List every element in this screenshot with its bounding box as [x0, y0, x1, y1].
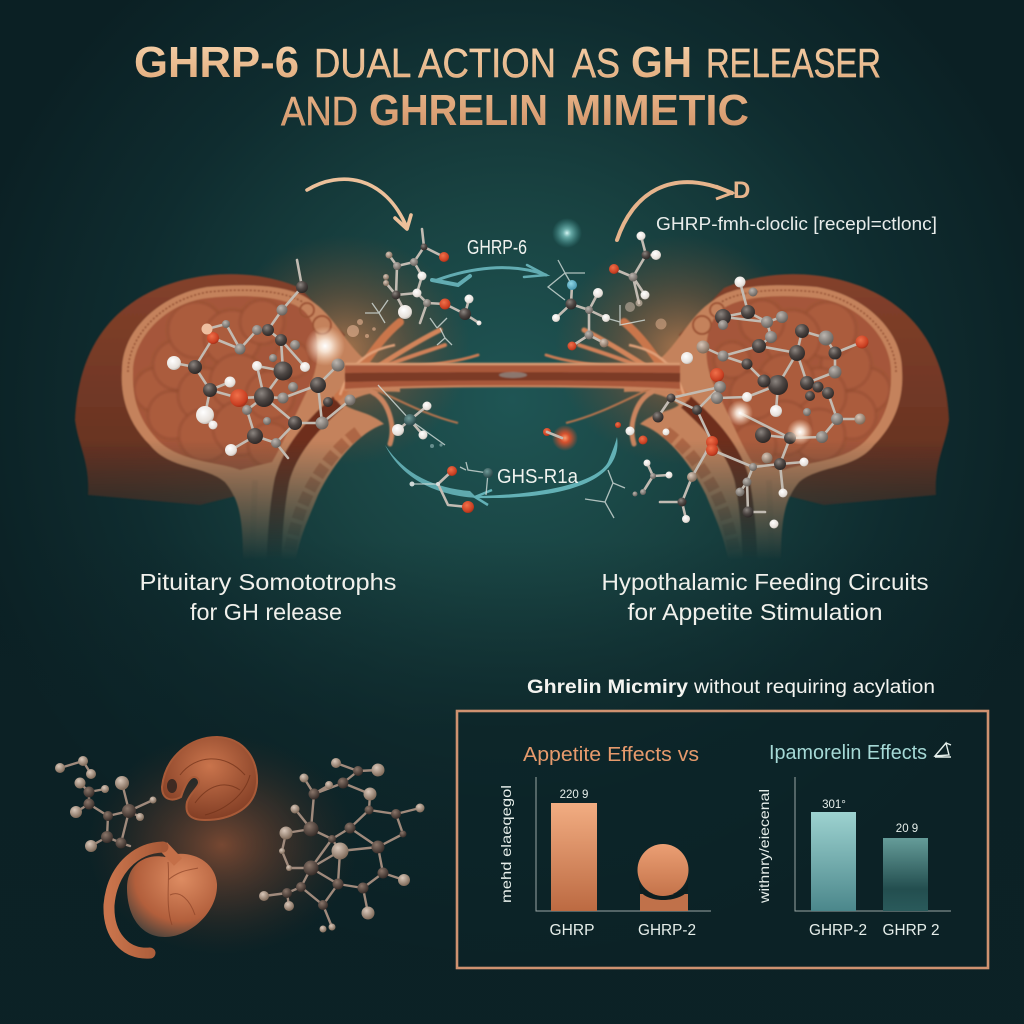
illustration: bottom-left organs: [55, 735, 424, 955]
title: AS: [572, 40, 620, 86]
panel: hypothalamus tissue: [546, 274, 949, 565]
chart: appetite: 220 9: [560, 789, 588, 801]
arrow: top left: [307, 179, 411, 229]
molecule: pituitary: [167, 260, 356, 458]
title: GHRELIN: [369, 86, 548, 135]
arrow: teal lower arc: [385, 437, 617, 505]
chart: ipamorelin: GHRP-2: [809, 922, 867, 939]
molecule: top centre right: [548, 232, 666, 350]
label: pituitary: for GH release: [190, 599, 342, 625]
title: DUAL ACTION: [314, 40, 556, 86]
label: GHRP-6: GHRP-6: [467, 237, 527, 259]
label: hypothalamic: for Appetite Stimulation: [628, 599, 882, 625]
title: [134, 38, 881, 135]
connecting stalk: [345, 364, 680, 390]
subheading: ghrelin mimicry: Ghrelin Micmiry: [527, 677, 688, 698]
icon: heart organ: [109, 846, 217, 953]
title: GHRP-6: [134, 38, 299, 87]
glow: pituitary: [305, 326, 345, 366]
panel: comparison box: [457, 711, 988, 968]
heading: ipamorelin effects: Ipamorelin Effects: [769, 742, 927, 764]
chart: appetite: mehd elaeqegol: [498, 785, 514, 903]
heading: appetite effects: Appetite Effects vs: [523, 744, 699, 766]
title: RELEASER: [706, 40, 881, 86]
label: hypothalamic: Hypothalamic Feeding Circuits: [602, 569, 928, 595]
icon: small triangle: [935, 743, 951, 757]
glow: teal particle: [552, 218, 582, 248]
chart: ipamorelin: withnry/eiecenal: [756, 789, 772, 904]
arrow: top right: D: [733, 177, 750, 204]
label: hypothalamic: [602, 569, 928, 625]
molecule: top centre left: [365, 229, 482, 345]
arrow: top right: [617, 177, 750, 240]
chart: ipamorelin: 301°: [822, 799, 846, 811]
molecule: bottom right: [259, 758, 424, 932]
panel: pituitary tissue: [75, 274, 478, 565]
title: AND: [281, 88, 358, 134]
chart: ipamorelin: [756, 777, 951, 939]
chart: appetite: GHRP: [550, 922, 594, 939]
label: pituitary: [140, 569, 396, 625]
chart: ipamorelin: 20 9: [896, 823, 918, 835]
molecule: GHS-R1a fragment: [410, 425, 625, 518]
title: GH: [631, 38, 692, 87]
title: MIMETIC: [565, 86, 749, 135]
molecule: lower left fragment: [378, 385, 445, 448]
neck glows: [220, 235, 805, 465]
chart: appetite: [498, 777, 711, 939]
label: receptor text: GHRP-fmh-cloclic [recepl=ctlonc]: [656, 214, 937, 234]
glows: hypothalamus: [727, 400, 813, 445]
molecule: bottom left: [55, 756, 156, 852]
label: pituitary: Pituitary Somototrophs: [140, 569, 396, 595]
arrow: teal upper: [432, 265, 546, 285]
label: GHS-R1a: GHS-R1a: [497, 466, 579, 488]
chart: appetite: GHRP-2: [638, 922, 696, 939]
subheading: ghrelin mimicry: [527, 677, 935, 698]
icon: stomach: [162, 737, 257, 820]
chart: ipamorelin: GHRP 2: [882, 922, 940, 939]
subheading: ghrelin mimicry: without requiring acylation: [693, 677, 935, 698]
molecule: right hypothalamus: [615, 276, 868, 528]
particles near pituitary: [347, 319, 376, 338]
